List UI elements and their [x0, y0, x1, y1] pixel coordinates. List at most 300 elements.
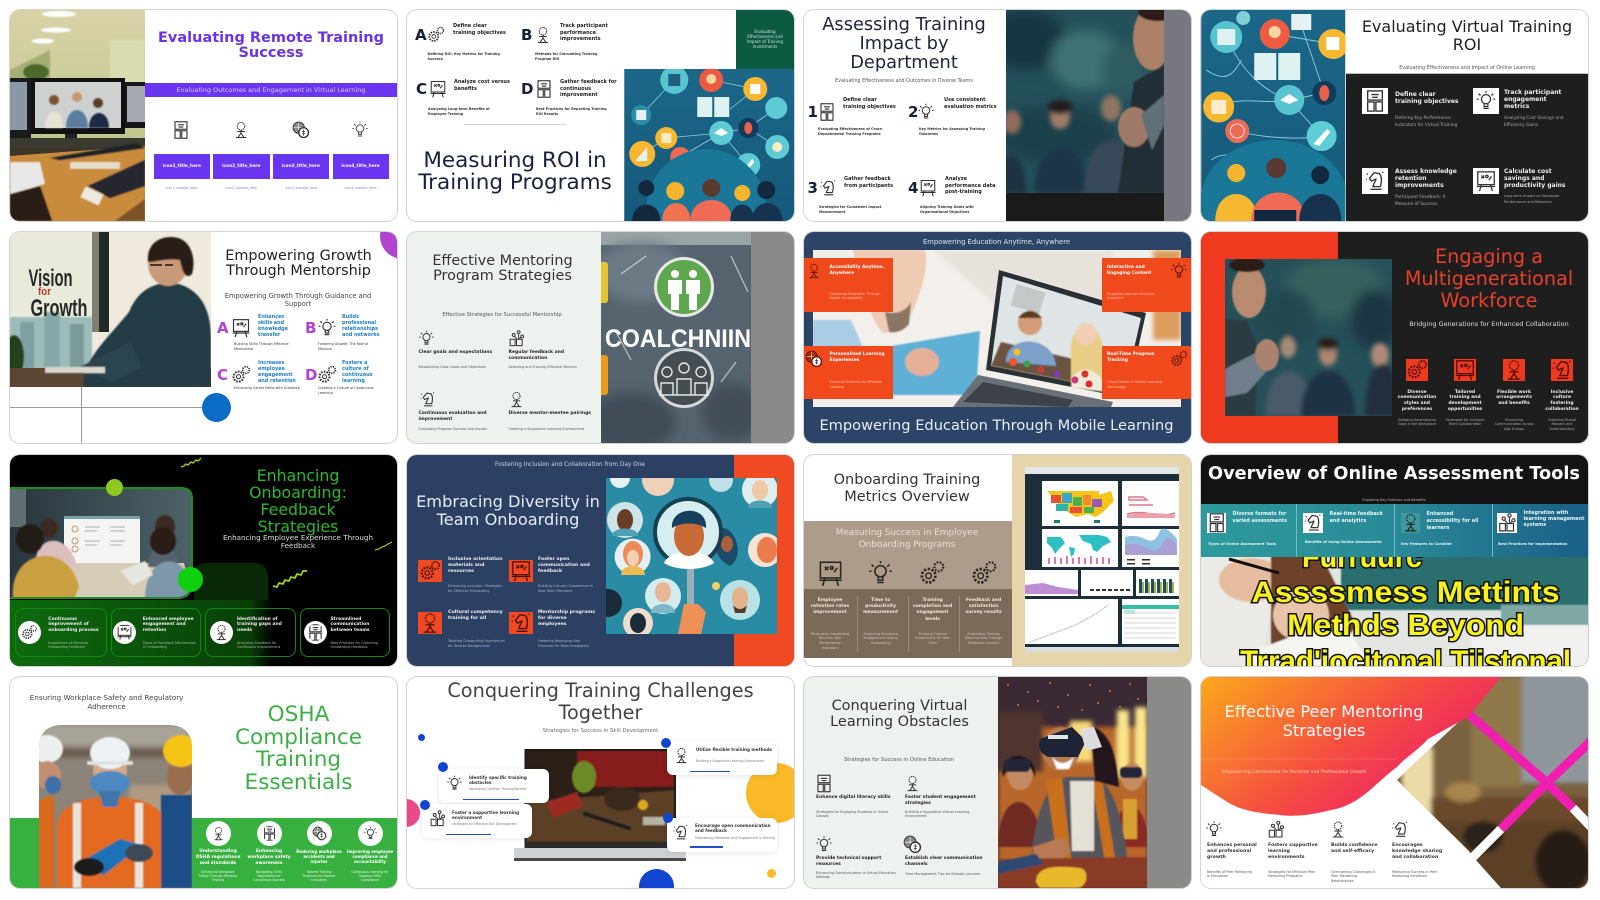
title: Assessing Training [822, 14, 986, 34]
column 3 text: Age Groups [1504, 427, 1524, 431]
panel: Evaluating Remote Training Success [10, 10, 397, 221]
decorative blue half circle [638, 869, 674, 900]
title [1405, 246, 1573, 312]
dark band with metric columns [804, 589, 1012, 658]
panel: Measuring ROI in Training Programs [407, 10, 794, 221]
badge 2 text: Navigating OSHA [256, 870, 282, 874]
letter C: C [217, 366, 228, 384]
column 3 heading: Training [922, 598, 943, 603]
item 4 heading: Establish clear communication [905, 856, 983, 861]
item 2 text: Outcomes [919, 132, 938, 136]
badge 3 heading: injuries [311, 859, 327, 864]
column 1 heading: styles and [1404, 401, 1430, 406]
subtitle: Measuring Success in Employee [836, 528, 978, 538]
title: Strategies [1283, 720, 1365, 740]
icon A [231, 317, 251, 339]
item 4 text [920, 205, 974, 214]
item B heading: improvements [560, 36, 601, 42]
tool 3 heading: Enhanced [1426, 511, 1453, 517]
icon [1170, 350, 1188, 368]
item A text [428, 52, 500, 61]
teal feature band [1201, 504, 1588, 557]
item 4 heading [905, 856, 983, 868]
badge 2 heading [247, 849, 291, 867]
heading: Personalized Learning [830, 352, 885, 357]
column 4 heading: collaboration [1545, 407, 1579, 412]
item 3 heading: training for all [448, 616, 486, 621]
item A heading: transfer [258, 332, 280, 338]
heading: Tracking [1107, 358, 1128, 363]
item B heading: relationships [342, 326, 378, 332]
text: Engaging Learners Anytime, [1107, 292, 1155, 296]
image: learning network illustration [1201, 10, 1346, 221]
card 3 [205, 608, 296, 657]
item C heading: Analyze cost versus [454, 79, 510, 85]
item 1 text: Defining Key Performance [1395, 116, 1451, 121]
tool 4 heading: learning management [1524, 516, 1584, 522]
column 4 heading [1545, 390, 1579, 413]
column 2 text: Team Collaboration [1449, 422, 1481, 426]
squiggle centre [271, 567, 311, 589]
item 4 text [538, 639, 589, 649]
column 1 heading: Employee [818, 598, 842, 603]
item 3 text [448, 639, 505, 649]
tool 4 heading: Integration with [1524, 510, 1568, 516]
item 1 heading: growth [1207, 855, 1226, 860]
item 2 heading: environments [1268, 855, 1304, 860]
icon 1 [418, 329, 435, 348]
heading: improvement of [48, 622, 89, 627]
item C heading: and retention [258, 378, 296, 384]
title: Training [256, 747, 341, 772]
icon square 4 [1551, 359, 1573, 381]
panel: OSHA Compliance Training Essentials [10, 677, 397, 888]
item C heading: engagement [258, 372, 293, 378]
item A text: Mentorship [234, 347, 253, 351]
panel: Assessing Training Impact by Department [804, 10, 1191, 221]
heading: Enhanced employee [143, 616, 194, 622]
item 1 heading [1207, 843, 1257, 862]
item 2 heading [1504, 89, 1562, 110]
progress bar [446, 834, 491, 835]
tool 2 icon [1302, 513, 1322, 532]
item A heading: training objectives [453, 30, 506, 36]
item 2 heading: learning [1268, 849, 1290, 854]
column 2 heading: training and [1449, 395, 1481, 400]
item B text [535, 52, 598, 61]
title: Feedback [260, 500, 336, 518]
column 1 heading: retention rates [811, 604, 849, 609]
decorative yellow dot [766, 868, 776, 878]
title: Together [559, 701, 642, 724]
item 3 text: Overcoming Challenges in [1331, 870, 1376, 874]
tool 4 heading: systems [1524, 522, 1546, 528]
icon 2 [904, 774, 921, 793]
subtitle: Support [285, 300, 311, 308]
column 4 heading: culture [1553, 395, 1571, 400]
item B heading: Track participant [560, 23, 608, 29]
item 2 text [1268, 870, 1316, 879]
badge C [661, 738, 671, 748]
text: Anywhere [1107, 296, 1124, 300]
subtitle: Evaluating Effectiveness and Impact of Online Learning [1399, 65, 1535, 71]
item 1 heading [1395, 91, 1458, 105]
item 3 text [816, 870, 896, 880]
item 1 heading: Define clear [1395, 91, 1436, 98]
text: Technology [1107, 385, 1126, 389]
badge 2 heading: awareness [255, 861, 283, 866]
box: icon 3 title [272, 154, 329, 179]
badge 1 text: Safety Through Effective [199, 874, 237, 878]
item 4 heading [538, 610, 595, 629]
icon D [317, 364, 337, 386]
icon 1 [815, 774, 833, 793]
column 1 text: Bridging Generational [1398, 418, 1436, 422]
item B text: Methods for Calculating Training [535, 52, 597, 56]
title: Effective Mentoring [432, 253, 573, 269]
item 3 icon [418, 612, 442, 634]
item 4 heading: performance data [945, 183, 995, 189]
item 2 heading [1268, 843, 1318, 862]
item 4 text [1392, 870, 1437, 879]
item 2 heading [944, 97, 997, 110]
column 2 heading: Time to [871, 598, 890, 603]
icon [113, 620, 136, 644]
item D text: Learning [318, 391, 333, 395]
title: Engaging a [1435, 244, 1543, 268]
top tagline: Fostering Inclusion and Collaboration from Day One [495, 462, 645, 468]
item 4 text: Mentoring Initiatives [1392, 874, 1427, 878]
panel: Effective Mentoring Program Strategies [407, 232, 794, 443]
column 4 heading: satisfaction [969, 604, 998, 609]
item 3 icon [1362, 168, 1388, 194]
column 4 heading: Inclusive [1551, 390, 1573, 394]
green dot [178, 566, 202, 592]
image: learning network illustration [624, 69, 794, 221]
letter A: A [415, 26, 427, 44]
progress bar [463, 798, 519, 800]
item D heading: continuous [342, 372, 372, 378]
icon: light bulb [352, 122, 368, 136]
header bar [1201, 455, 1588, 504]
title [416, 493, 600, 529]
panel: Conquering Training Challenges Together [407, 677, 794, 888]
item 4 heading [945, 176, 996, 195]
text [1107, 380, 1162, 390]
panel: Empowering Growth Through Mentorship [10, 232, 397, 443]
heading: Foster a supportive learning [452, 810, 519, 815]
item 3 heading: improvements [1395, 182, 1444, 189]
heading [469, 775, 527, 785]
item 4 heading: productivity gains [1504, 182, 1566, 189]
text: Future Trends in Mobile Learning [1107, 380, 1162, 384]
column 1 text: Performance [819, 641, 841, 645]
item B heading: Builds [342, 314, 359, 320]
badge 3 heading: Reducing workplace [296, 849, 342, 854]
item 2 heading: Use consistent [944, 97, 986, 103]
item 2 icon [509, 560, 533, 582]
badge 3 text: Tailored Training [306, 870, 332, 874]
item 2 heading: Foster student engagement [905, 795, 976, 800]
item 2 heading: strategies [905, 801, 931, 806]
heading [1107, 352, 1154, 364]
decorative corner circle [380, 213, 426, 259]
item 2 heading: metrics [1504, 103, 1529, 110]
heading [143, 616, 194, 634]
column 3 text [1495, 418, 1533, 432]
text: Maintaining Motivation and Engagement in Training [695, 836, 775, 840]
text [143, 640, 196, 650]
heading: Identify specific training [469, 775, 527, 780]
item 1 heading [448, 557, 503, 576]
column 3 heading: levels [925, 617, 940, 622]
title: Impact by [860, 32, 948, 54]
heading: Identification of [237, 616, 278, 622]
title [1362, 17, 1572, 54]
photo: man at window with Vision for Growth: for [38, 286, 52, 298]
column 3 heading: and benefits [1498, 401, 1530, 406]
badge 3 heading: accidents and [303, 854, 335, 859]
item 2 heading: Track participant [1504, 89, 1561, 96]
subtitle [223, 534, 373, 550]
column 1 text: Indicators [822, 646, 838, 650]
letter D: D [521, 80, 533, 98]
column 2 text: Strategies for Inclusive [1445, 418, 1485, 422]
callout: accessibility [804, 258, 893, 312]
column 2 heading: development [1448, 401, 1482, 406]
heading: Accessibility Anytime, [830, 265, 884, 270]
item 2 text: Building a Supportive Virtual Learning [905, 810, 969, 814]
item 4 heading: channels [905, 862, 928, 867]
icon C [231, 364, 251, 386]
text: in Onboarding [143, 645, 167, 649]
tool 1 heading: Diverse formats for [1232, 511, 1286, 517]
item 1 text: Indicators for Virtual Training [1395, 122, 1457, 128]
title [830, 699, 969, 730]
badge 2 text [253, 870, 285, 882]
item 3 heading: Builds confidence [1331, 843, 1378, 848]
item A heading [453, 23, 506, 36]
item B heading [560, 23, 608, 42]
item 3 text: Participant Feedback: A [1395, 195, 1446, 200]
tool 2 heading: Real-time feedback [1330, 511, 1383, 517]
icon [806, 262, 822, 280]
item 1 text: Departmental Training Programs [818, 132, 881, 136]
item 3 heading: Continuous evaluation and [418, 411, 487, 416]
text: Building a Supportive Learning Environment [696, 759, 764, 763]
item D text [536, 107, 607, 116]
icon 3 [820, 180, 836, 196]
subtitle: Exploring Key Features and Benefits [1362, 498, 1426, 502]
column 2 heading: productivity [865, 604, 896, 609]
item 3 text: Measure of Success [1395, 202, 1437, 206]
column 2 heading: Tailored [1455, 390, 1475, 394]
item 2 heading: feedback [538, 569, 562, 574]
column 2 heading: measurement [863, 610, 898, 615]
item 3 heading: Provide technical support [816, 856, 881, 861]
item 4 heading: for diverse [538, 616, 567, 621]
column 1 text: Measuring Onboarding [811, 632, 849, 636]
icon [210, 620, 232, 644]
item A heading: Define clear [453, 23, 487, 29]
icon 2 [508, 329, 525, 348]
tool 2 heading: and analytics [1330, 518, 1366, 524]
subtitle: Onboarding Programs [859, 540, 955, 550]
text: Enhancing Education Through [830, 292, 880, 296]
subtitle: Empowering Connections for Personal and Professional Growth [1222, 770, 1367, 775]
column 2 text [863, 632, 898, 646]
column 1 heading: Diverse [1407, 390, 1427, 394]
column 4 text [1548, 418, 1576, 432]
item 2 text: Key Metrics for Assessing Training [919, 127, 985, 131]
item 2 heading: engagement [1504, 96, 1547, 103]
item 3 heading: Cultural competency [448, 610, 503, 615]
column 4 text: Respect and [1552, 422, 1572, 426]
item 1 heading: materials and [448, 563, 484, 568]
photo: students with distorted headline: Assssmess Mettints [1252, 576, 1560, 609]
heading: environment [452, 815, 482, 820]
column 2 heading [863, 598, 898, 617]
badge 4 text: Continuous Learning for [351, 870, 389, 874]
item 3 text: Relationships [1331, 879, 1354, 883]
badge 2 icon [256, 820, 282, 846]
heading [330, 616, 370, 634]
item 4 heading: post-training [945, 189, 982, 195]
heading [237, 616, 282, 634]
column 1 text [1398, 418, 1436, 427]
icon 4 [508, 390, 525, 409]
decorative pink circle [392, 799, 420, 827]
item 4 icon [509, 612, 533, 634]
column 2 text: Engagement During [864, 636, 898, 640]
heading: between teams [330, 628, 370, 633]
item 3 heading: Assess knowledge [1395, 168, 1457, 175]
heading: communication [330, 622, 369, 627]
item 2 heading: Foster open [538, 557, 569, 562]
title [225, 249, 372, 279]
letter C: C [416, 80, 427, 98]
badge A [438, 762, 448, 772]
item 4 text: Time Management Tips for Remote Learners [905, 872, 980, 876]
heading: Continuous [48, 616, 77, 622]
column 1 heading: communication [1398, 395, 1436, 400]
column 1 text: Success: Key [819, 636, 841, 640]
photo: feedback meeting [10, 487, 193, 599]
item A heading: skills and [258, 320, 284, 326]
item A text: Success [428, 57, 443, 61]
icon [446, 774, 463, 793]
green label block: Effectiveness and [747, 34, 783, 39]
item 1 heading: Clear goals and expectations [418, 350, 492, 355]
item A heading [258, 314, 288, 338]
decorative blue dot [418, 734, 424, 740]
photo: laptop video call [813, 250, 1181, 407]
icon square 2 [1454, 359, 1476, 381]
badge 4 heading [347, 849, 393, 864]
item 3 heading: retention [1395, 175, 1427, 182]
column 3 text: Enhancing [1505, 418, 1523, 422]
subtitle band [145, 83, 397, 97]
badge 3 text: Industries [311, 878, 327, 882]
subtitle: Ensuring Workplace Safety and Regulatory [30, 693, 183, 702]
decorative yellow circle [746, 763, 806, 823]
icon 3 [815, 835, 833, 854]
item 4 text [1504, 194, 1559, 205]
badge 4 text: Compliance [361, 878, 379, 882]
icon: board [817, 560, 844, 587]
text: Identifying Common Training Barriers [469, 787, 527, 791]
item 2 text: Building Cultural Competence in [538, 584, 593, 588]
title: Learning Obstacles [830, 714, 969, 730]
column 3 text: Productivity for New [915, 636, 950, 640]
text [830, 380, 882, 390]
item D heading: improvement [560, 92, 598, 98]
card: flexible methods [667, 741, 777, 775]
box: icon 3 title: icon3_title_here [282, 164, 320, 169]
item 2 heading: Fosters supportive [1268, 843, 1318, 848]
icon C: board [430, 80, 446, 98]
green label block: Evaluating [754, 29, 776, 34]
badge 3 text: Programs for Diverse [303, 874, 335, 878]
letter B: B [521, 26, 532, 44]
item 4 text: Performance and Retention [1504, 200, 1552, 204]
column 4 heading: Feedback and [966, 598, 1001, 603]
column 2 heading [1448, 390, 1482, 413]
item C heading: benefits [454, 86, 477, 92]
heading: Utilize flexible training methods [696, 747, 772, 752]
item B heading: and networks [342, 332, 380, 338]
item 1 text: in Education [1207, 874, 1228, 878]
column 3 heading: completion and [913, 604, 952, 609]
title: OSHA [268, 702, 329, 727]
panel: Enhancing Onboarding: Feedback Strategies [10, 455, 397, 666]
item 4 heading [1504, 169, 1566, 189]
badge 4 text: Ongoing OSHA [359, 874, 381, 878]
title [418, 148, 612, 195]
item 4 heading: and collaboration [1392, 855, 1438, 860]
icon D: screen stack [537, 80, 551, 98]
item B text: Fostering Growth: The Role of [318, 342, 368, 346]
number 3: 3 [808, 179, 818, 197]
text [237, 640, 280, 650]
item 1 heading: training objectives [1395, 98, 1458, 105]
badge 1 heading: Understanding [199, 849, 237, 854]
tool 4 text: Best Practices for Implementation [1498, 542, 1567, 546]
column 3 text: Tracking Time to [919, 632, 947, 636]
progress bar [690, 770, 730, 772]
caption 4: icon4_subtitle_here [344, 186, 377, 190]
text [830, 292, 880, 301]
item B text: Program ROI [535, 57, 559, 61]
column 3 heading [1496, 390, 1532, 407]
subtitle: Evaluating Effectiveness and Outcomes in Diverse Teams [835, 79, 973, 84]
icon: head gears [918, 560, 946, 587]
item 1 icon [418, 560, 442, 582]
text: Onboarding Feedback [48, 645, 85, 649]
subtitle: Empowering Growth Through Guidance and [225, 292, 371, 300]
illustration: diverse faces under magnifier [606, 478, 776, 634]
callout: interactive content [1102, 258, 1191, 312]
column 4 text: Fostering Mutual [1548, 418, 1576, 422]
item 1 text: Embracing Inclusion: Strategies [448, 584, 502, 588]
subtitle [836, 527, 978, 551]
badge 1 text: Enhancing Workplace [201, 870, 235, 874]
column 3 heading: engagement [917, 610, 949, 615]
item 3 heading: and self-efficacy [1331, 849, 1374, 854]
photo: video conference office [10, 10, 145, 221]
badge 3 heading [296, 849, 342, 864]
column 4 heading: fostering [1550, 401, 1574, 406]
